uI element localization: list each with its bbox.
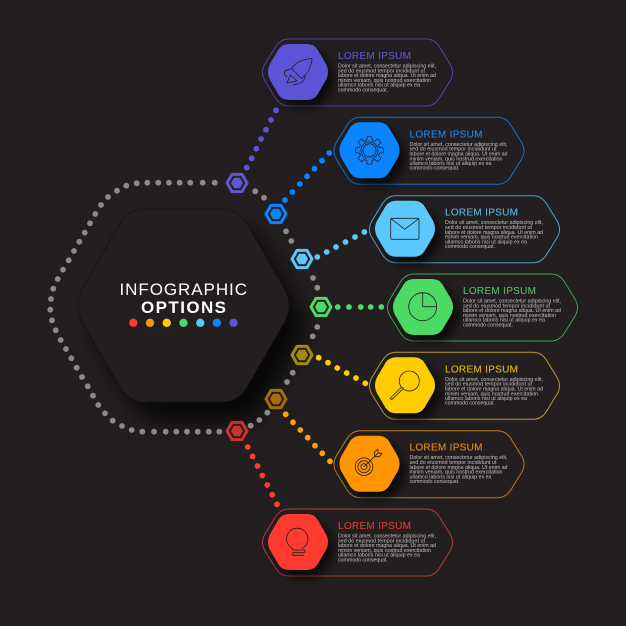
icon: pie chart	[409, 293, 437, 321]
icon: magnifier	[392, 371, 419, 398]
text block	[410, 142, 508, 172]
text block: minim veniam, quis nostrud exercitation	[445, 391, 538, 397]
panel: option 7 red	[262, 509, 452, 576]
node: blue	[266, 205, 286, 223]
icon: gear	[356, 137, 383, 164]
blue dotted connector	[282, 150, 332, 203]
text block: sed do eiusmod tempor incididunt ut	[445, 225, 533, 231]
gray dotted connectors between nodes	[248, 188, 320, 429]
node: yellow	[292, 346, 312, 364]
text block: commodo consequat.	[445, 401, 495, 407]
text block: Dolor sit amet, consectetur adipiscing elit,	[445, 220, 543, 226]
text block: labore et dolore magna aliqua. Ut enim ad	[410, 465, 508, 471]
heading: LOREM IPSUM	[445, 364, 518, 375]
text block: ullamco laboris nisi ut aliquip ex ea	[463, 318, 545, 324]
panel: option 5 yellow	[370, 352, 560, 419]
text block	[410, 455, 508, 485]
text block: minim veniam, quis nostrud exercitation	[338, 78, 431, 84]
text block: Dolor sit amet, consectetur adipiscing elit,	[445, 377, 543, 383]
text block: sed do eiusmod tempor incididunt ut	[445, 382, 533, 388]
text block: labore et dolore magna aliqua. Ut enim ad	[445, 230, 543, 236]
panel: option 4 green	[388, 274, 578, 341]
text block	[463, 298, 561, 328]
text block: commodo consequat.	[445, 244, 495, 250]
text block: ullamco laboris nisi ut aliquip ex ea	[445, 396, 527, 402]
red dotted connector	[245, 444, 280, 507]
node: green	[311, 298, 331, 316]
node: purple	[227, 174, 247, 192]
icon: rocket	[284, 58, 312, 85]
text block: labore et dolore magna aliqua. Ut enim ad	[338, 543, 436, 549]
central hexagon	[78, 209, 289, 402]
text block: ullamco laboris nisi ut aliquip ex ea	[338, 83, 420, 89]
text block: sed do eiusmod tempor incididunt ut	[410, 460, 497, 466]
purple dotted connector	[244, 107, 279, 171]
node: orange	[266, 390, 286, 408]
heading: LOREM IPSUM	[410, 129, 482, 140]
text block: Dolor sit amet, consectetur adipiscing elit,	[338, 534, 436, 540]
text block: ullamco laboris nisi ut aliquip ex ea	[410, 474, 492, 480]
text block: commodo consequat.	[338, 557, 388, 563]
central title	[120, 280, 247, 317]
panel: option 6 orange	[334, 431, 524, 498]
heading: LOREM IPSUM	[445, 208, 518, 219]
text block: minim veniam, quis nostrud exercitation	[338, 548, 431, 554]
green dotted connector	[335, 304, 384, 310]
heading: LOREM IPSUM	[410, 443, 482, 454]
icon: target	[355, 449, 382, 476]
node: red	[227, 422, 247, 440]
text block: minim veniam, quis nostrud exercitation	[410, 470, 503, 476]
orange dotted connector	[283, 411, 333, 464]
text block: sed do eiusmod tempor incididunt ut	[338, 538, 426, 544]
heading: LOREM IPSUM	[338, 51, 411, 62]
text block: ullamco laboris nisi ut aliquip ex ea	[445, 239, 527, 245]
text block: sed do eiusmod tempor incididunt ut	[410, 147, 497, 153]
panel: option 2 blue	[334, 117, 524, 184]
yellow dotted connector	[316, 355, 368, 386]
text block: sed do eiusmod tempor incididunt ut	[338, 68, 426, 74]
central title: OPTIONS	[141, 298, 226, 317]
text block: labore et dolore magna aliqua. Ut enim ad	[338, 73, 436, 79]
text block: commodo consequat.	[338, 87, 388, 93]
text block	[445, 220, 543, 250]
text block: labore et dolore magna aliqua. Ut enim ad	[463, 308, 561, 314]
central colour dots	[129, 319, 238, 327]
text block: commodo consequat.	[410, 479, 460, 485]
text block: ullamco laboris nisi ut aliquip ex ea	[338, 553, 420, 559]
panel: option 3 sky	[370, 196, 560, 263]
text block: Dolor sit amet, consectetur adipiscing elit,	[463, 298, 561, 304]
icon: envelope	[391, 218, 419, 239]
text block	[445, 377, 543, 407]
text block: ullamco laboris nisi ut aliquip ex ea	[410, 161, 492, 167]
text block: commodo consequat.	[463, 322, 513, 328]
text block: Dolor sit amet, consectetur adipiscing elit,	[410, 455, 508, 461]
heading: LOREM IPSUM	[338, 521, 411, 532]
text block	[338, 64, 436, 93]
panel: option 1 purple	[262, 39, 452, 106]
text block: labore et dolore magna aliqua. Ut enim ad	[445, 386, 543, 392]
gray dotted outer path	[47, 180, 222, 435]
text block	[338, 534, 436, 563]
text block: Dolor sit amet, consectetur adipiscing elit,	[410, 142, 508, 148]
central title: INFOGRAPHIC	[120, 280, 247, 299]
text block: minim veniam, quis nostrud exercitation	[410, 156, 503, 162]
sky dotted connector	[314, 229, 367, 260]
node: sky	[292, 250, 312, 268]
icon: light bulb	[287, 528, 308, 555]
text block: commodo consequat.	[410, 166, 460, 172]
text block: Dolor sit amet, consectetur adipiscing elit,	[338, 64, 436, 70]
text block: sed do eiusmod tempor incididunt ut	[463, 303, 551, 309]
text block: minim veniam, quis nostrud exercitation	[445, 235, 538, 241]
text block: minim veniam, quis nostrud exercitation	[463, 313, 556, 319]
heading: LOREM IPSUM	[463, 286, 536, 297]
text block: labore et dolore magna aliqua. Ut enim ad	[410, 152, 508, 158]
